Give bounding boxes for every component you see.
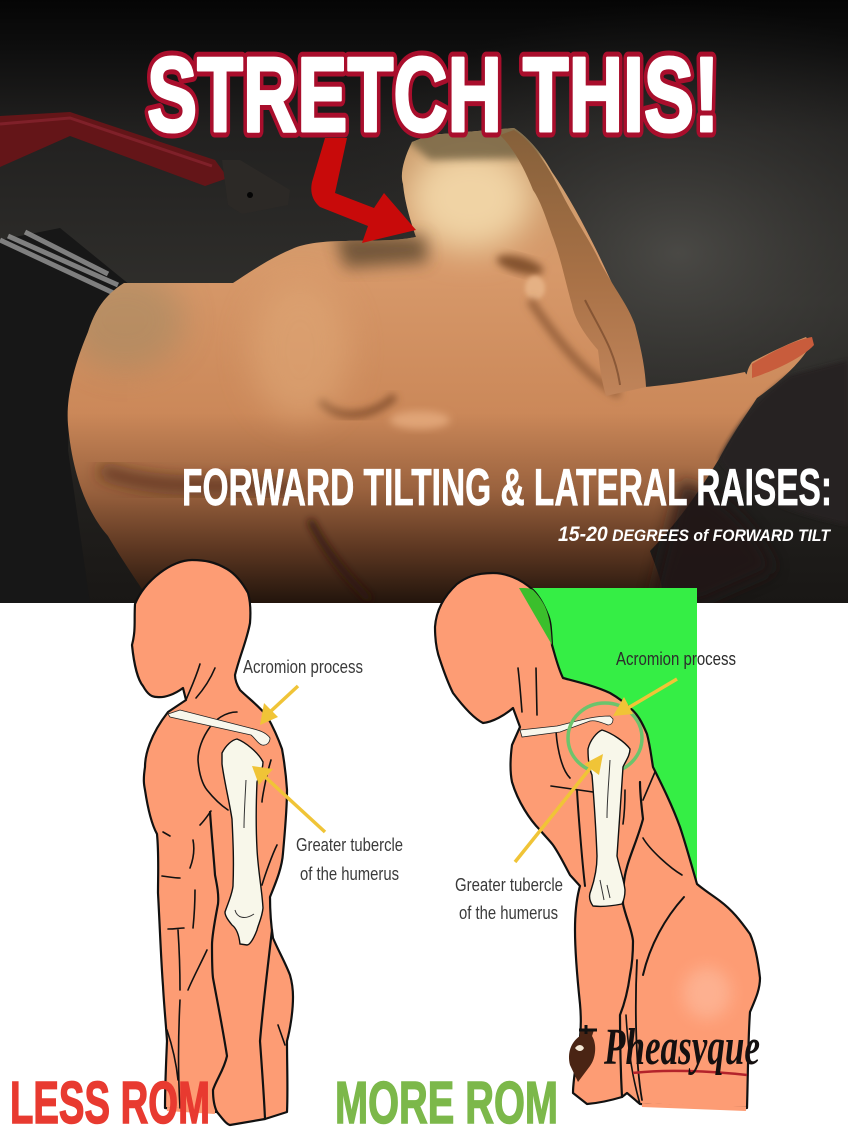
arrow: red pointer (311, 138, 416, 243)
icon: pen nib (569, 1025, 597, 1082)
bench bar (0, 112, 253, 198)
panel: green tilt wedge (519, 588, 697, 892)
logo: Pheasyque (569, 1019, 760, 1082)
logo: Pheasyque: Pheasyque (603, 1019, 760, 1076)
label: greater tubercle (296, 835, 403, 884)
arrow: acromion process (613, 679, 677, 716)
figure: less ROM anatomy (132, 560, 403, 1125)
label: greater tubercle: of the humerus (300, 864, 399, 884)
collar bone (168, 710, 270, 745)
humerus bone (222, 739, 263, 945)
muscle and arm outlines (518, 668, 755, 1104)
hip highlight (683, 967, 731, 1019)
hair (719, 360, 848, 525)
panel: gym photo (0, 0, 848, 605)
green range circle (568, 703, 642, 773)
head green overlap (519, 588, 552, 645)
torso (60, 120, 830, 605)
label: greater tubercle: Greater tubercle (296, 835, 403, 855)
label: greater tubercle (455, 875, 563, 923)
title: stretch this (144, 50, 716, 138)
panel: white lower background (0, 603, 848, 1141)
collar bone (520, 716, 613, 737)
arrow: greater tubercle (252, 766, 325, 832)
hand (752, 337, 814, 378)
training pants (0, 228, 128, 534)
label: acromion process: Acromion process (243, 657, 363, 677)
humerus bone (588, 730, 630, 906)
subheading: degrees of tilt: 15-20 DEGREES of FORWARD TILT (558, 523, 831, 546)
arrow: greater tubercle (515, 754, 603, 862)
muscle and arm outlines (162, 664, 285, 1119)
label: acromion process: Acromion process (616, 649, 736, 669)
label: more ROM: MORE ROM (335, 1070, 558, 1136)
dark right-bottom shadow (651, 472, 731, 588)
label: greater tubercle: Greater tubercle (455, 875, 563, 895)
arrow: acromion process (260, 686, 298, 725)
figure: more ROM anatomy (435, 573, 760, 1109)
label: greater tubercle: of the humerus (459, 903, 558, 923)
label: less ROM: LESS ROM (10, 1070, 210, 1136)
raised arm (500, 130, 646, 396)
